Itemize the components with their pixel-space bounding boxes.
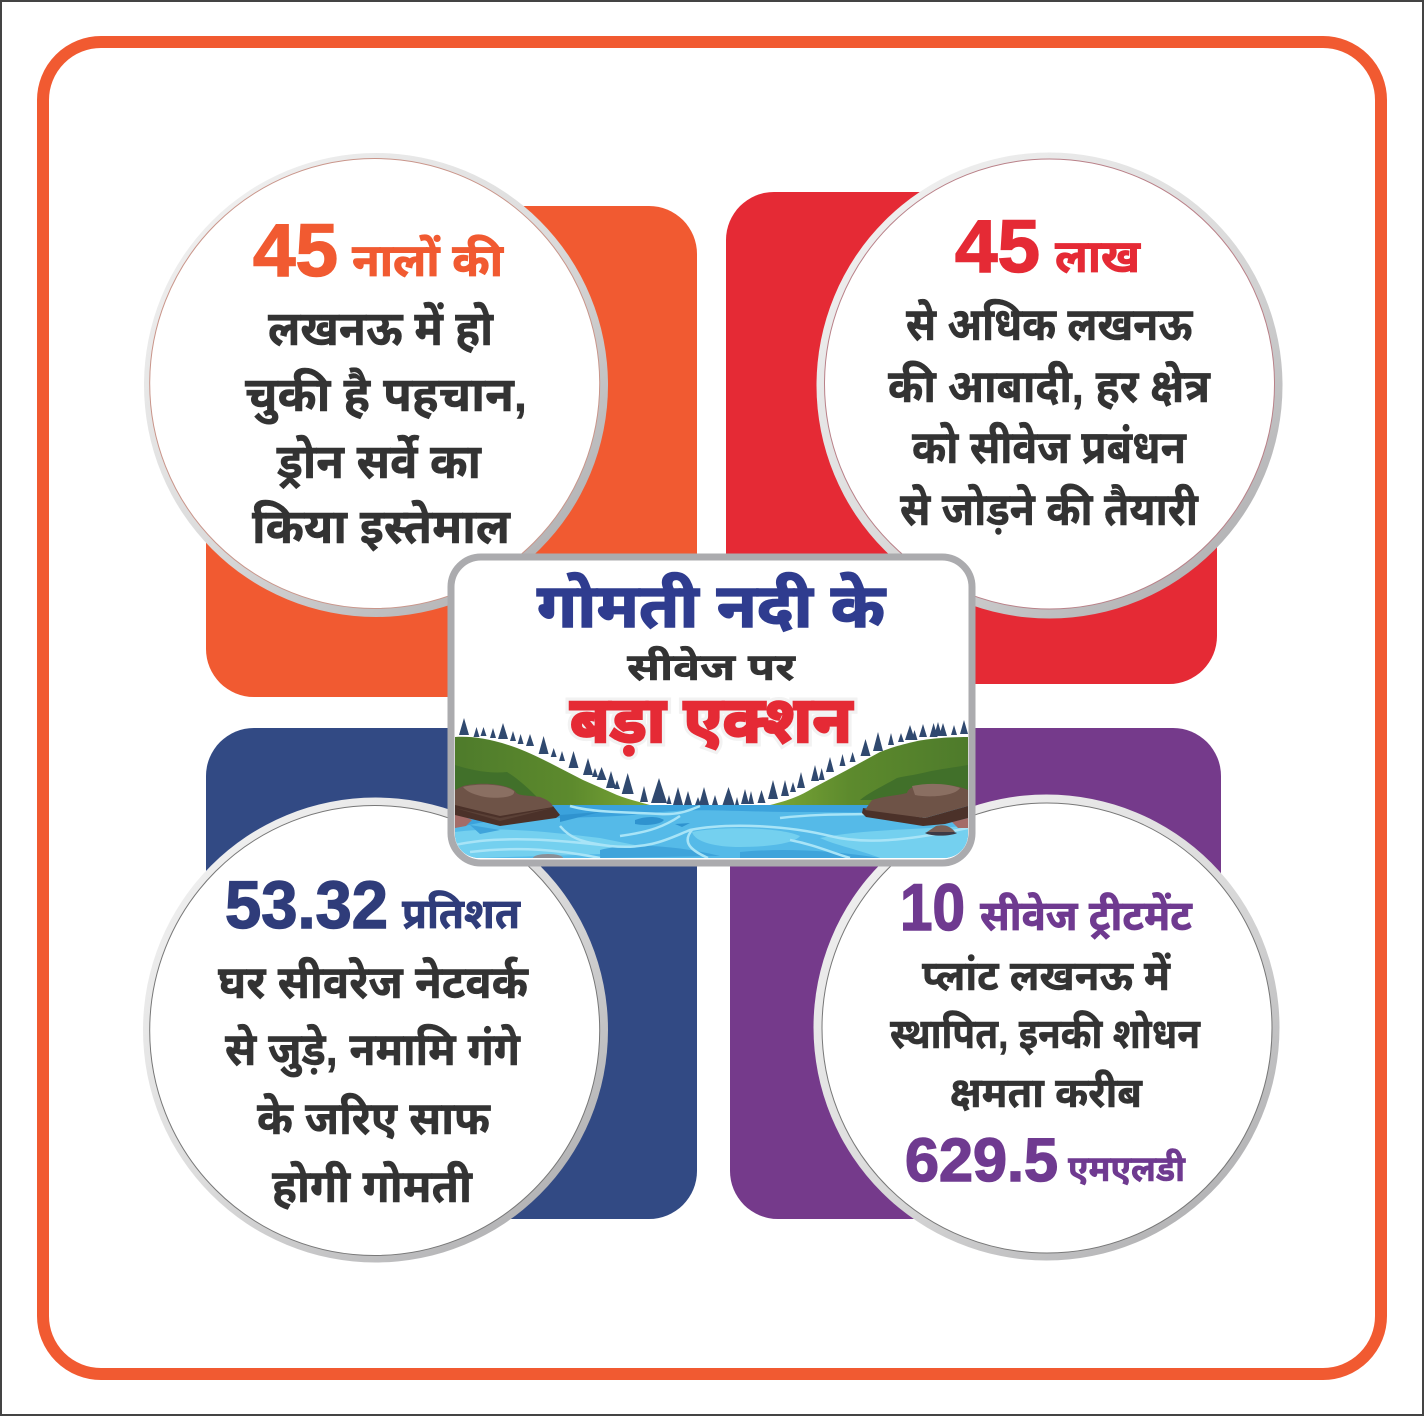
heading: 45 lakh: लाख xyxy=(1055,230,1141,282)
text block: sewer network description: से जुड़े, नमामि गंगे xyxy=(225,1022,521,1077)
text block: plants description xyxy=(890,952,1201,1116)
heading: 10 treatment plants: 10 xyxy=(900,870,965,944)
text block: drains description: किया इस्तेमाल xyxy=(252,499,512,554)
text block: sewer network description: घर सीवरेज नेटवर्क xyxy=(218,955,529,1008)
right rocks xyxy=(862,784,968,836)
heading: 53.32 percent xyxy=(225,868,521,943)
panel: purple quadrant xyxy=(730,728,1221,1219)
subtitle: sewage: सीवेज पर xyxy=(627,645,796,689)
panel: 45 drains circle xyxy=(144,153,608,617)
left rocks xyxy=(455,784,560,828)
submerged stone xyxy=(533,854,563,858)
text block: plants description: स्थापित, इनकी शोधन xyxy=(890,1010,1201,1057)
text block: drains description: लखनऊ में हो xyxy=(268,301,494,356)
text block: population description xyxy=(888,297,1211,535)
right hill xyxy=(770,737,968,805)
text block: sewer network description: होगी गोमती xyxy=(272,1160,473,1212)
text block: drains description xyxy=(245,301,527,554)
title: Gomti river: गोमती नदी के xyxy=(537,572,886,640)
panel: 45 lakh circle xyxy=(816,152,1282,618)
heading: 10 treatment plants: सीवेज ट्रीटमेंट xyxy=(980,892,1193,940)
panel: blue quadrant xyxy=(206,728,697,1219)
text block: sewer network description xyxy=(218,955,529,1212)
trees xyxy=(459,718,968,805)
heading: 45 lakh xyxy=(955,205,1141,288)
heading: 10 treatment plants xyxy=(900,870,1193,944)
text block: plants description: क्षमता करीब xyxy=(950,1069,1143,1116)
panel: orange quadrant xyxy=(206,206,697,697)
illustration: river landscape xyxy=(455,718,968,862)
heading: 53.32 percent: प्रतिशत xyxy=(402,890,521,937)
panel: 53.32 percent circle xyxy=(143,798,608,1262)
title: big action: बड़ा एक्शन xyxy=(570,684,854,756)
stat: 629.5 MLD xyxy=(905,1126,1186,1194)
stat: 629.5 MLD: 629.5 xyxy=(905,1126,1058,1194)
water xyxy=(455,805,968,859)
text block: drains description: ड्रोन सर्वे का xyxy=(276,434,482,490)
text block: plants description: प्लांट लखनऊ में xyxy=(922,952,1171,999)
text block: population description: की आबादी, हर क्षेत्र xyxy=(888,359,1211,412)
text block: population description: से जोड़ने की तैयारी xyxy=(900,482,1199,535)
heading: 45 drains: 45 xyxy=(253,209,338,292)
left hill xyxy=(455,737,650,805)
heading: 45 lakh: 45 xyxy=(955,205,1040,288)
heading: 45 drains xyxy=(253,209,504,292)
text block: population description: से अधिक लखनऊ xyxy=(906,297,1194,350)
panel: 10 treatment plants circle xyxy=(814,794,1280,1260)
text block: drains description: चुकी है पहचान, xyxy=(245,367,527,424)
text block: sewer network description: के जरिए साफ xyxy=(257,1091,491,1144)
stat: 629.5 MLD: एमएलडी xyxy=(1068,1148,1186,1189)
title: big action: बड़ा एक्शन xyxy=(570,684,854,756)
panel: central title card xyxy=(451,557,972,863)
panel: red quadrant xyxy=(726,192,1217,684)
heading: 53.32 percent: 53.32 xyxy=(225,868,388,943)
heading: 45 drains: नालों की xyxy=(352,234,504,286)
text block: population description: को सीवेज प्रबंधन xyxy=(912,420,1187,473)
